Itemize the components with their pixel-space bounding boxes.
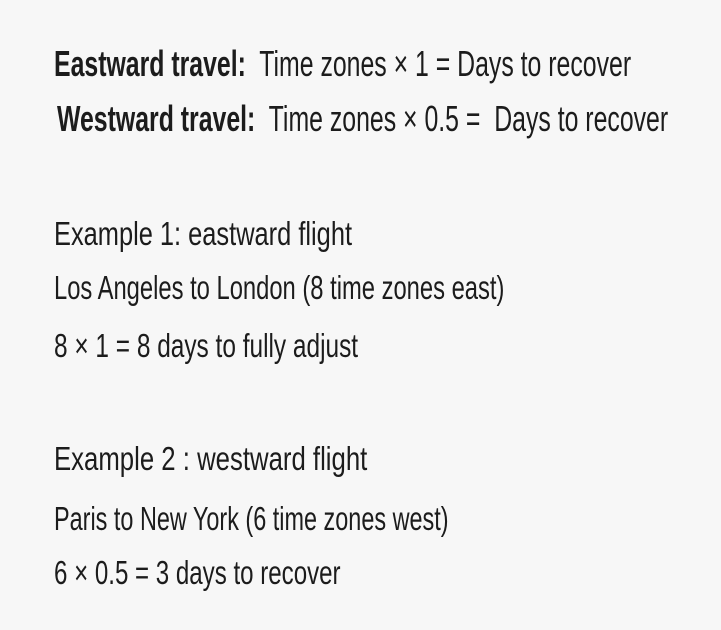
example 1 route: Los Angeles to London (8 time zones east) [54,269,504,306]
example 2 route: Paris to New York (6 time zones west) [54,500,449,537]
example 2 heading: Example 2 : westward flight [54,440,367,477]
example 2 calculation: 6 × 0.5 = 3 days to recover [54,554,341,591]
formula: westward: Westward travel: Time zones × 0.5 = Days to recover [57,98,668,139]
example 1 calculation: 8 × 1 = 8 days to fully adjust [54,327,358,364]
example 1 heading: Example 1: eastward flight [54,215,352,252]
formula: eastward: Eastward travel: Time zones × 1 = Days to recover [54,43,631,84]
